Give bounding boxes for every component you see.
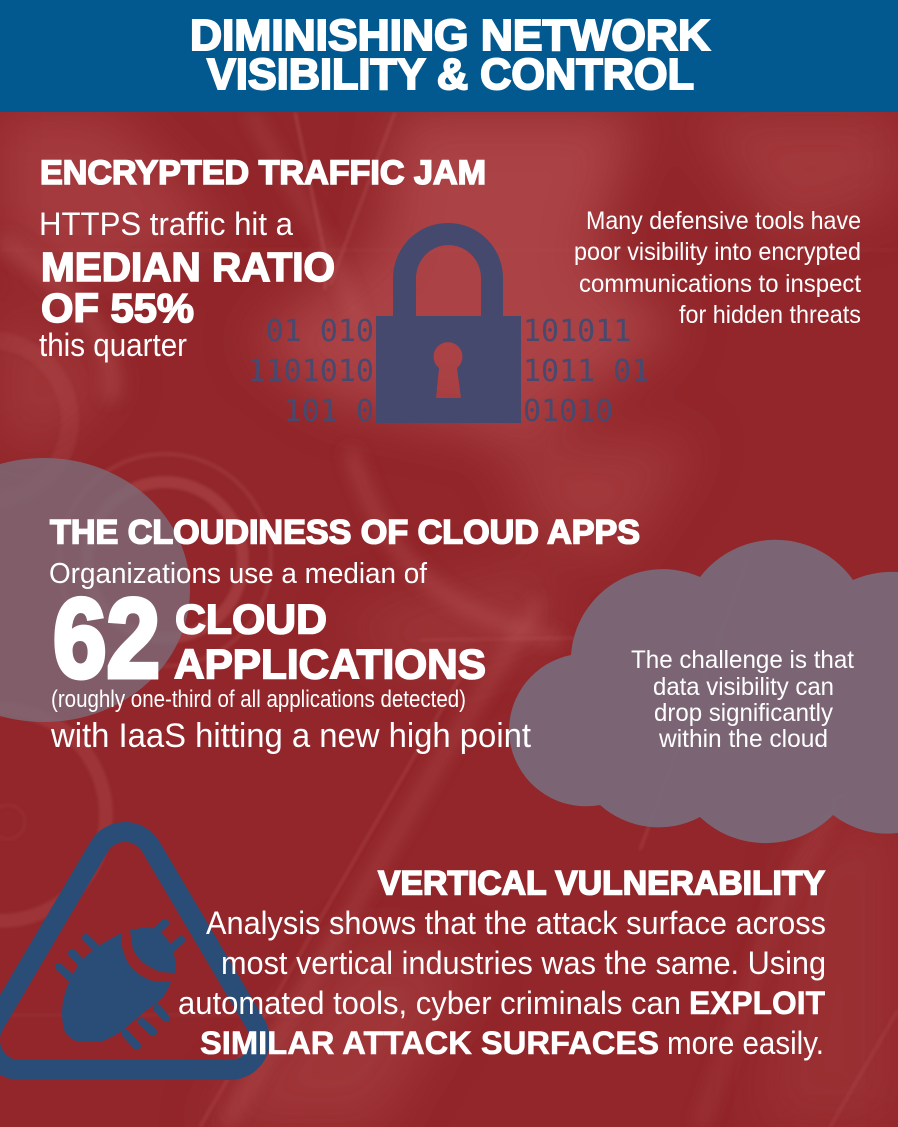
binary digits — [248, 314, 649, 429]
text: defensive tools: for hidden threats — [679, 301, 861, 329]
stat: 62: 62 — [53, 576, 160, 701]
binary digits: 01010 — [523, 394, 613, 429]
text: attack surface analysis: automated tools, cyber criminals can — [178, 985, 681, 1021]
binary digits: 01 010 — [266, 314, 374, 349]
text: cloud challenge: data visibility can — [653, 673, 834, 701]
text: attack surface analysis: SIMILAR ATTACK SURFACES — [200, 1025, 659, 1061]
text: defensive tools — [574, 207, 861, 329]
text: cloud challenge: within the cloud — [658, 725, 828, 753]
text: attack surface analysis — [178, 905, 826, 1061]
bug body — [62, 933, 171, 1042]
bug legs — [59, 923, 181, 1046]
stat text: HTTPS median ratio: MEDIAN RATIO — [41, 244, 335, 290]
stat text: HTTPS median ratio — [39, 206, 335, 363]
panel: cloud apps — [49, 514, 854, 755]
stat text: HTTPS median ratio: this quarter — [39, 327, 187, 363]
shape: right cloud — [509, 540, 898, 843]
text: defensive tools: poor visibility into encrypted — [574, 238, 861, 266]
title: VISIBILITY & CONTROL — [207, 50, 694, 99]
text: attack surface analysis: more easily. — [667, 1025, 824, 1061]
stat label: cloud applications — [174, 596, 486, 688]
stat text: HTTPS median ratio: OF 55% — [41, 285, 194, 331]
text: attack surface analysis: EXPLOIT — [689, 985, 825, 1021]
text: organizations use: Organizations use a median of — [49, 558, 428, 590]
panel: vertical vulnerability — [178, 864, 826, 1061]
text: defensive tools: Many defensive tools have — [586, 207, 861, 235]
text: IaaS high point: with IaaS hitting a new high point — [50, 717, 532, 755]
title: DIMINISHING NETWORK — [190, 11, 710, 60]
stat label: cloud applications: CLOUD — [175, 596, 327, 642]
text: one-third note: (roughly one-third of all applications detected) — [51, 686, 466, 713]
panel: encrypted traffic — [39, 154, 861, 429]
heading: cloudiness of cloud apps: THE CLOUDINESS OF CLOUD APPS — [50, 514, 640, 552]
text: cloud challenge — [631, 646, 854, 753]
title — [190, 11, 710, 99]
header banner — [0, 0, 898, 112]
text: defensive tools: communications to inspect — [579, 270, 861, 298]
stat label: cloud applications: APPLICATIONS — [174, 640, 486, 688]
text: attack surface analysis: most vertical industries was the same. Using — [221, 945, 826, 981]
text: cloud challenge: The challenge is that — [631, 646, 854, 674]
heading: vertical vulnerability: VERTICAL VULNERABILITY — [378, 864, 825, 902]
binary digits: 101 0 — [284, 394, 374, 429]
binary digits: 1011 01 — [523, 354, 649, 389]
stat text: HTTPS median ratio: HTTPS traffic hit a — [39, 206, 293, 242]
binary digits: 1101010 — [248, 354, 374, 389]
icon: padlock — [376, 223, 521, 423]
shape: left cloud lobe — [0, 458, 190, 722]
binary digits: 101011 — [523, 314, 631, 349]
icon: warning triangle with bug — [0, 832, 260, 1070]
text: attack surface analysis: Analysis shows that the attack surface across — [206, 905, 826, 941]
text: cloud challenge: drop significantly — [654, 699, 833, 727]
heading: encrypted traffic jam: ENCRYPTED TRAFFIC JAM — [40, 154, 486, 192]
bug head — [130, 927, 175, 973]
